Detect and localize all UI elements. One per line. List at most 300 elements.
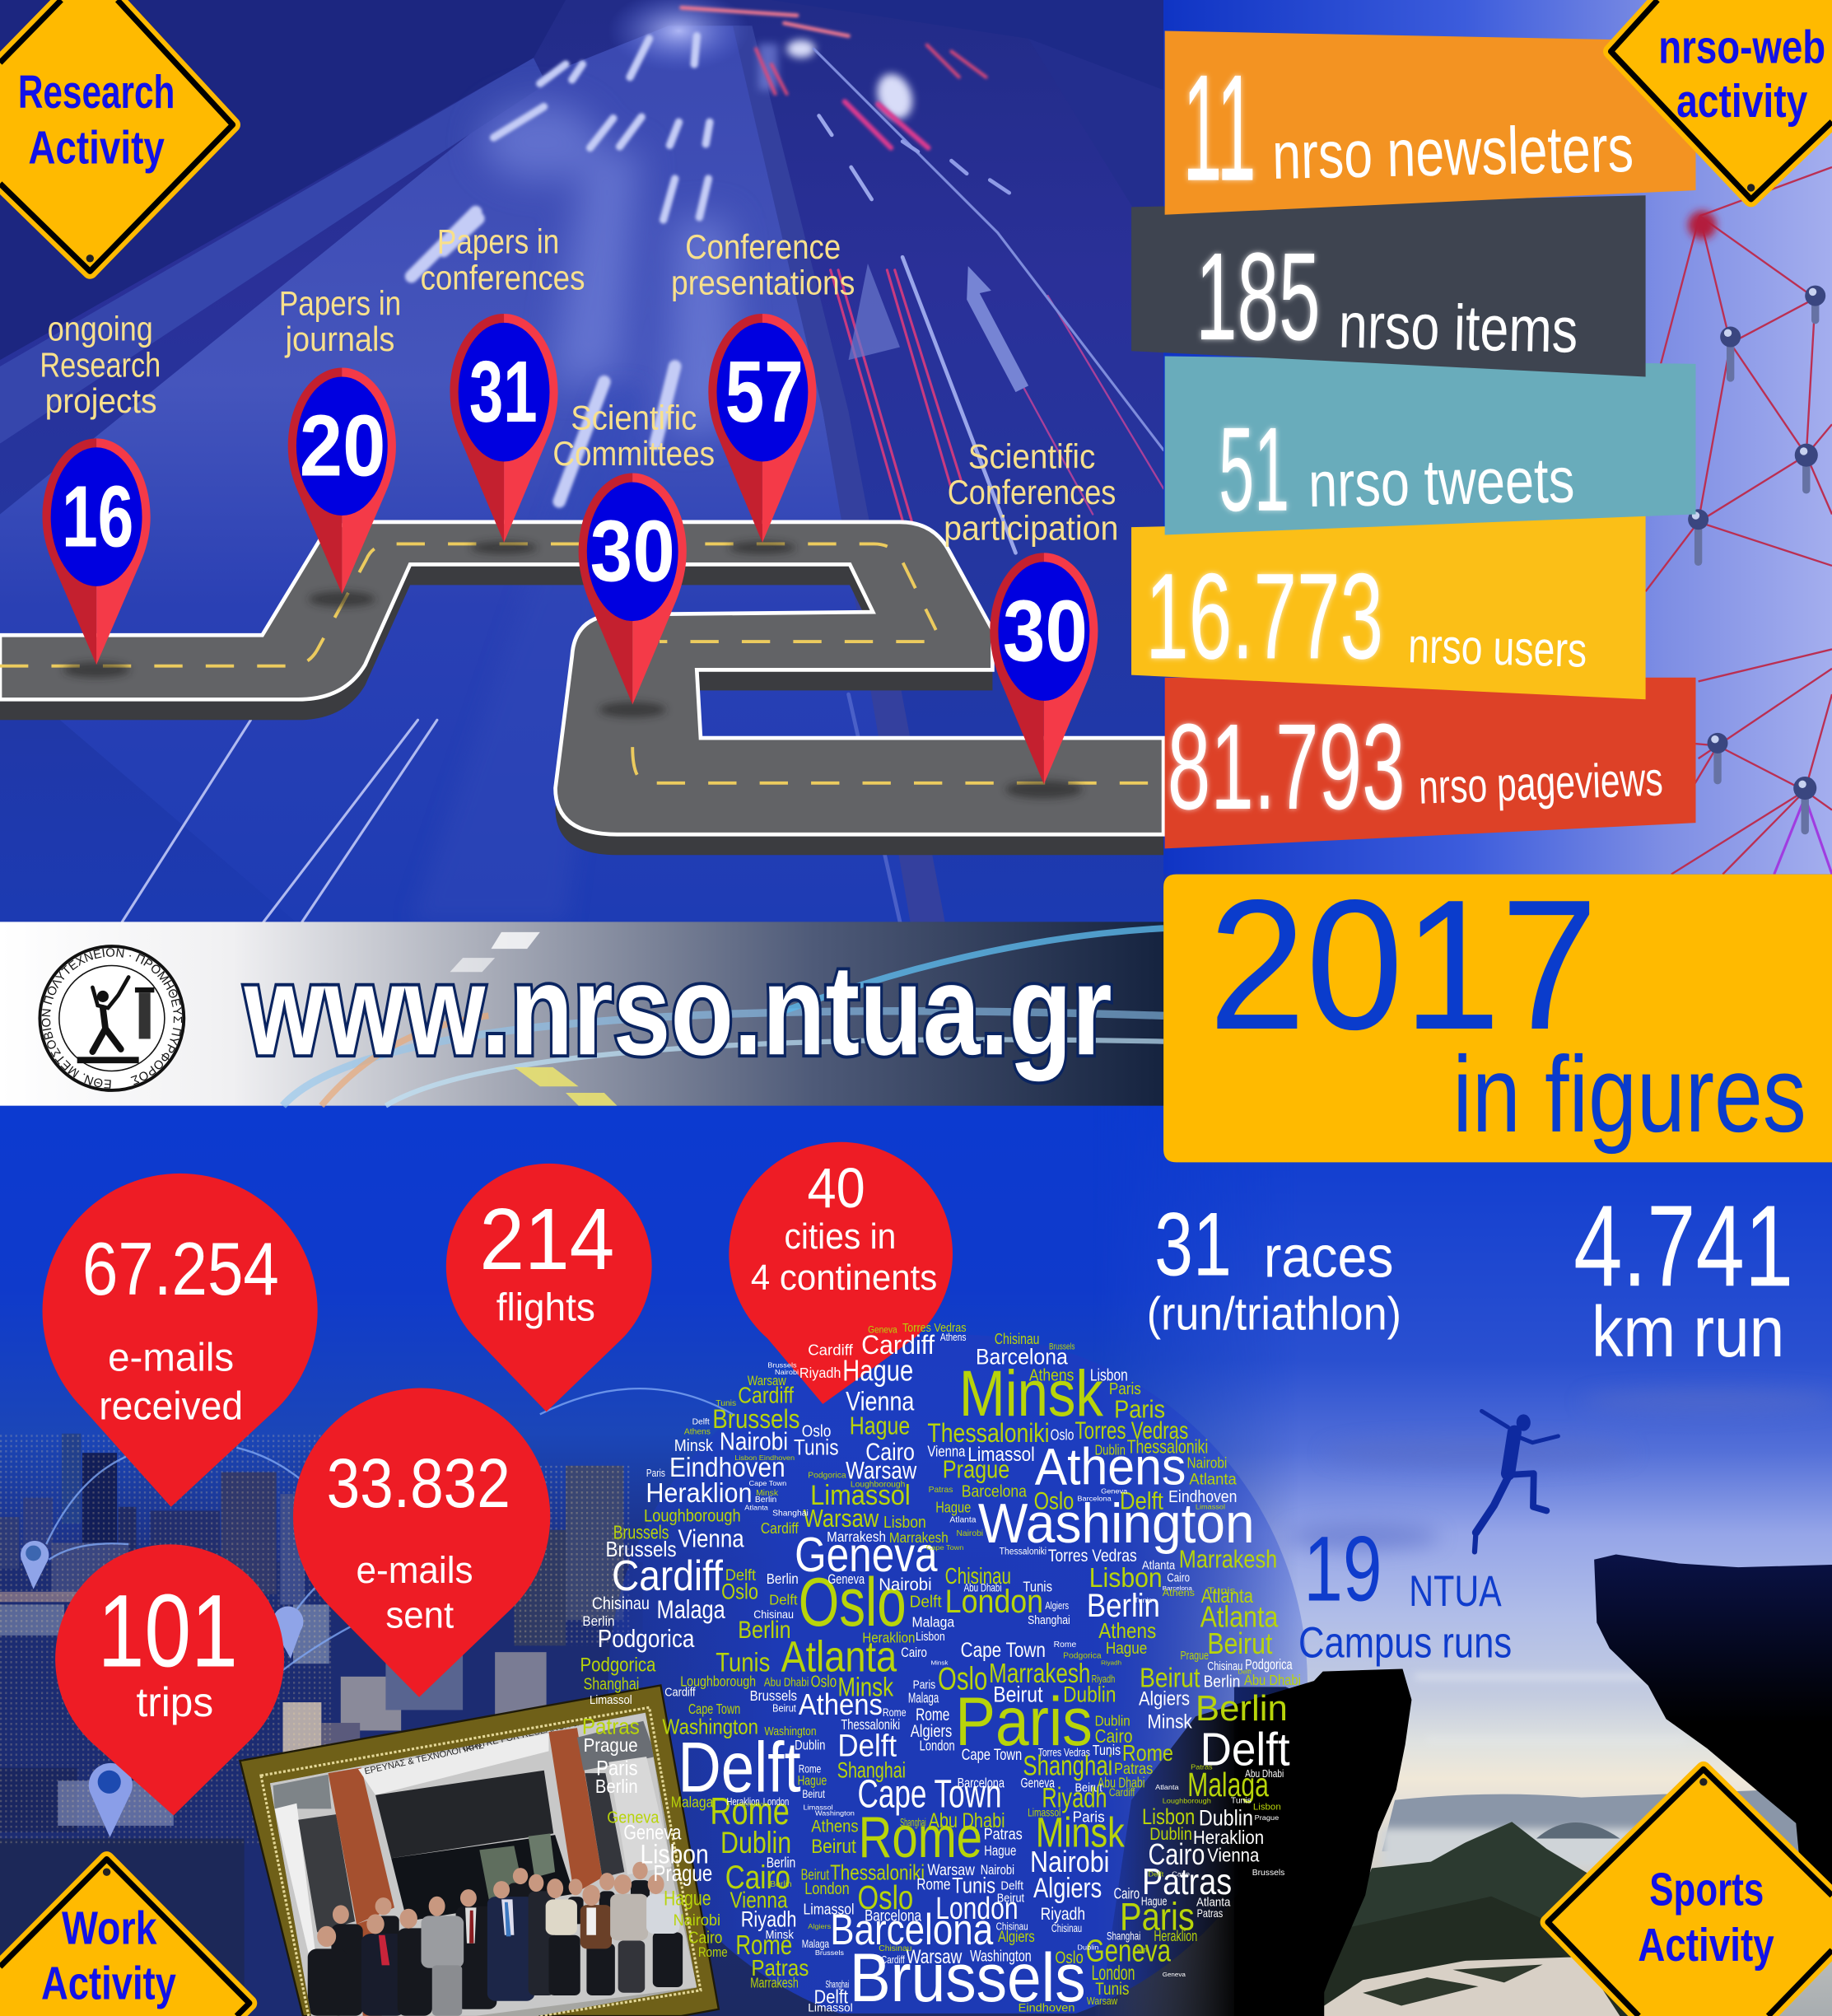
label: scientific conferences participation [944,436,1118,548]
wordcloud of cities: Nairobi [981,1862,1014,1878]
wordcloud of cities: Geneva [1101,1487,1127,1495]
label: scientific conferences participation: Scientific [968,436,1095,475]
wordcloud of cities: Brussels [850,1939,1086,2016]
map pin: conference presentations 57: 57 [725,343,804,441]
bar: nrso tweets [1165,356,1695,536]
wordcloud of cities: Cape Town [748,1479,786,1487]
network lines and nodes [1646,167,1832,875]
wordcloud of cities: Marrakesh [827,1528,886,1545]
wordcloud of cities: Rome [916,1705,949,1724]
sign: sports activity: Activity [1638,1919,1774,1971]
network photo background [1163,0,1832,875]
wordcloud of cities: Geneva [827,1572,865,1587]
wordcloud of cities: Delft [725,1566,756,1584]
wordcloud of cities: Delft [769,1592,798,1608]
wordcloud of cities: Athens [1035,1437,1186,1496]
wordcloud of cities: Beirut [1075,1781,1102,1795]
wordcloud of cities: Thessaloniki [841,1717,900,1733]
red pin: 101 trips: 101 [98,1574,238,1688]
wordcloud of cities: Barcelona [976,1344,1068,1369]
wordcloud of cities: Minsk [1147,1711,1192,1733]
label: scientific committees: Scientific [571,398,697,436]
wordcloud of cities: London [763,1795,789,1808]
panel: 2017 in figures: 2017 [1209,861,1598,1068]
banner: website url [0,922,1163,1106]
wordcloud of cities: Limassol [808,2002,853,2014]
wordcloud of cities: Prague [1181,1650,1209,1663]
label: conference presentations: presentations [671,264,855,302]
wordcloud of cities: Dublin [1149,1824,1192,1844]
wordcloud of cities: Abu Dhabi [764,1676,809,1689]
wordcloud of cities: Heraklion [739,1801,767,1808]
wordcloud of cities: Delft [814,1986,848,2007]
wordcloud of cities: Dublin [1095,1442,1126,1458]
bar: nrso pageviews: 81.793 [1168,699,1405,835]
wordcloud of cities: Cairo [688,1929,722,1947]
wordcloud of cities: Berlin [770,1880,792,1889]
logo: NTUA seal: ΕΘΝ. ΜΕΤΣΟΒΙΟΝ ΠΟΛΥΤΕΧΝΕΙΟΝ · ΠΡΟΜΗΘΕΥΣ ΠΥΡΦΟΡΟΣ [41,948,183,1089]
wordcloud of cities: Limassol [967,1444,1035,1466]
wordcloud of cities: Cape Town [857,1771,1002,1816]
wordcloud of cities: Paris [955,1683,1093,1760]
wordcloud of cities: Delft [1134,1947,1149,1953]
wordcloud of cities: Chisinau [753,1608,794,1622]
wordcloud of cities: Tunis [1095,1978,1130,1999]
wordcloud of cities: Atlanta [781,1632,897,1681]
wordcloud of cities: Barcelona [958,1776,1005,1790]
bar: nrso users [1131,516,1646,699]
wordcloud of cities: Eindhoven [669,1453,785,1483]
wordcloud of cities: Cape Town [962,1746,1022,1764]
wordcloud of cities: Lisbon [1142,1804,1195,1829]
wordcloud of cities: Abu Dhabi [1245,1767,1284,1780]
map pin: conference presentations 57 [708,314,816,543]
wordcloud of cities: Atlanta [1196,1896,1231,1910]
wordcloud of cities: London [945,1583,1043,1620]
wordcloud of cities: Podgorica [1245,1657,1293,1673]
wordcloud of cities: Chisinau [879,1944,911,1953]
stat: NTUA campus runs: Campus runs [1298,1618,1512,1667]
red pin: 214 flights: 214 [479,1191,614,1288]
wordcloud of cities: Paris [1073,1809,1105,1826]
wordcloud of cities: Rome [883,1706,907,1720]
wordcloud of cities: Nairobi [775,1368,799,1376]
wordcloud of cities: Prague [584,1735,638,1756]
stats: races and kilometres: (run/triathlon) [1147,1287,1401,1339]
wordcloud of cities: Rome [859,1805,982,1870]
red pin: 33.832 e-mails sent: sent [385,1594,455,1636]
wordcloud of cities: Berlin [738,1617,791,1644]
wordcloud of cities: Brussels [1049,1342,1075,1352]
red pin: 214 flights: flights [496,1286,595,1328]
red pin: 33.832 e-mails sent [293,1388,550,1697]
wordcloud of cities: Riyadh [1041,1904,1085,1924]
bottom panel background: sky, city and cliffs [0,1106,1832,2016]
wordcloud of cities: Shanghai [772,1510,809,1518]
wordcloud of cities: London [935,1892,1019,1926]
wordcloud of cities: Washington [978,1492,1255,1554]
wordcloud of cities: Dublin [1077,1944,1098,1952]
wordcloud of cities: Dublin [795,1738,825,1752]
red pin: 214 flights [446,1164,652,1412]
far hills and valley [1312,1790,1832,2016]
wordcloud of cities: Warsaw [927,1861,975,1879]
wordcloud of cities: Nairobi [674,1912,720,1930]
red pin: 40 cities in 4 continents: 4 continents [751,1258,937,1298]
wordcloud of cities: Berlin [1204,1673,1240,1692]
red pin: 33.832 e-mails sent: 33.832 [327,1444,510,1522]
stats: races and kilometres: 31 [1154,1195,1232,1295]
bar: nrso newsletters: 11 [1182,44,1256,213]
wordcloud of cities: Beirut [997,1892,1025,1905]
wordcloud of cities: Berlin [1196,1689,1288,1729]
wordcloud of cities: London [1092,1962,1135,1985]
wordcloud of cities: Geneva [607,1808,660,1827]
wordcloud of cities: Torres Vedras [1075,1418,1188,1444]
wordcloud of cities: Delft [1238,1668,1252,1675]
red pin: 67.254 e-mails received: 67.254 [82,1228,279,1311]
bar: nrso tweets: nrso tweets [1308,443,1575,520]
wordcloud of cities: Patras [1142,1861,1232,1902]
stat: NTUA campus runs: 19 [1303,1517,1382,1621]
wordcloud of cities: Minsk [930,1659,949,1667]
wordcloud of cities: Hague [850,1412,910,1440]
sign: work activity: Activity [41,1958,176,2009]
wordcloud of cities: Malaga [1187,1766,1269,1804]
wordcloud of cities: Lisbon [1090,1366,1128,1384]
wordcloud of cities: Oslo [799,1564,907,1640]
wordcloud of cities: London [920,1738,955,1753]
wordcloud of cities: London [804,1880,850,1898]
wordcloud of cities: Limassol [590,1694,632,1707]
wordcloud of cities: Rome [1122,1741,1173,1766]
wordcloud of cities: Shanghai [825,1979,849,1990]
wordcloud of cities: Marrakesh [750,1975,799,1991]
red pin: 33.832 e-mails sent: e-mails [357,1549,473,1591]
label: conference presentations: Conference [685,227,841,266]
wordcloud of cities: Cape [1172,1870,1190,1878]
sign: research activity [0,0,233,271]
red pin: 67.254 e-mails received [43,1174,318,1507]
wordcloud of cities: Oslo [938,1660,987,1696]
wordcloud of cities: Lisbon Eindhoven [734,1454,795,1462]
wordcloud of cities: Chisinau [945,1564,1011,1589]
wordcloud of cities: Vienna [846,1387,915,1416]
wordcloud of cities: Delft [1200,1724,1290,1776]
label: scientific committees [552,398,715,473]
wordcloud of cities: Tunis [952,1873,995,1897]
wordcloud of cities: Oslo [721,1579,758,1603]
wordcloud of cities: Riyadh [1042,1782,1107,1813]
banner: website url: www.nrso.ntua.gr [244,939,1112,1082]
label: papers in conferences [421,222,585,296]
label: papers in journals: journals [284,320,394,358]
panel: 2017 in figures [1163,861,1832,1162]
wordcloud of cities: Brussels [750,1687,797,1704]
wordcloud of cities: Berlin [767,1571,799,1587]
label: papers in journals: Papers in [279,284,401,322]
wordcloud of cities: Algiers [911,1721,952,1741]
wordcloud of cities: Rome [698,1944,728,1960]
wordcloud of cities: Algiers [1033,1872,1102,1904]
wordcloud of cities: Cairo [1148,1838,1205,1871]
wordcloud of cities: Shanghai [900,1817,926,1829]
wordcloud of cities: Cairo [1114,1886,1140,1902]
red pin: 101 trips [55,1544,284,1815]
bar: nrso newsletters: nrso newsleters [1271,112,1634,194]
wordcloud of cities: Heraklion [1193,1827,1264,1848]
wordcloud of cities: Geneva [1086,1934,1171,1968]
wordcloud of cities: Rome [799,1763,821,1776]
wordcloud of cities: Paris [646,1467,665,1479]
wordcloud of cities: Barcelona [865,1907,922,1925]
wordcloud of cities: Atlanta [744,1504,768,1511]
wordcloud of cities: Delft [910,1593,942,1611]
wordcloud of cities: Lisbon [916,1630,945,1644]
wordcloud of cities: Atlanta [1189,1471,1238,1488]
wordcloud of cities: Cardiff [738,1383,795,1408]
wordcloud of cities: Hague [1106,1640,1147,1658]
wordcloud of cities: Cardiff [808,1342,853,1360]
wordcloud of cities: Tunis [716,1649,770,1678]
wordcloud of cities: Patras [1197,1908,1223,1920]
wordcloud of cities: Shanghai [1028,1613,1070,1627]
sign: work activity: Work [62,1902,157,1954]
bar: nrso users: 16.773 [1145,548,1383,684]
bar: nrso users: nrso users [1407,618,1587,678]
red pin: 40 cities in 4 continents: 40 [808,1156,865,1220]
wordcloud of cities: Tunis [794,1435,839,1459]
wordcloud of cities: Malaga [908,1690,939,1706]
wordcloud of cities: Beirut [811,1836,856,1858]
wordcloud of cities: Beirut [1207,1627,1272,1660]
wordcloud of cities: Oslo [1034,1488,1074,1514]
wordcloud of cities: Delft [678,1727,801,1807]
wordcloud of cities: Cape Town [961,1640,1046,1662]
red pin: 40 cities in 4 continents: cities in [784,1216,896,1257]
sign: nrso-web activity: activity [1676,75,1807,127]
wordcloud of cities: Abu Dhabi [1098,1775,1144,1790]
wordcloud of cities: Athens [799,1688,883,1721]
wordcloud of cities: Cardiff [881,1953,905,1966]
wordcloud of cities: Atlanta [1155,1783,1179,1791]
wordcloud of cities: Loughborough [680,1673,756,1689]
wordcloud of cities: Brussels [712,1405,799,1435]
sign: sports activity [1548,1769,1832,2016]
wordcloud of cities: Riyadh [799,1365,841,1381]
wordcloud of cities: Heraklion [862,1630,916,1645]
wordcloud of cities: Malaga [671,1794,714,1812]
icon: jumping runner silhouette [1475,1411,1558,1552]
wordcloud of cities: Warsaw [846,1458,916,1484]
wordcloud of cities: Atlanta [1201,1586,1253,1608]
wordcloud of cities: Cairo [865,1440,915,1466]
wordcloud of cities: Beirut [993,1682,1043,1706]
wordcloud of cities: Minsk [674,1437,713,1455]
wordcloud of cities: Vienna [927,1444,966,1460]
map pin: papers in journals 20 [288,368,396,594]
wordcloud of cities: Athens [1029,1366,1074,1384]
wordcloud of cities: Riyadh [1101,1659,1121,1667]
wordcloud of cities: Oslo [1051,1427,1074,1444]
wordcloud of cities: Prague [1255,1813,1279,1822]
wordcloud of cities: Patras [751,1956,809,1981]
wordcloud of cities: Malaga [802,1938,830,1951]
wordcloud of cities: Beirut [801,1867,830,1883]
wordcloud of cities: Eindhoven [1019,2002,1075,2014]
map pin: scientific conferences participation 30: 30 [1003,582,1088,679]
wordcloud of cities: Limassol [1028,1807,1061,1819]
wordcloud of cities: Rome [1054,1640,1077,1650]
wordcloud of cities: Oslo [1055,1948,1084,1967]
wordcloud of cities: Hague [1141,1895,1167,1909]
wordcloud of cities: Heraklion [1154,1928,1197,1945]
wordcloud of cities: Hague [984,1843,1016,1859]
wordcloud of cities: Eindhoven [1168,1488,1237,1506]
city skyline [0,1434,643,2016]
wordcloud of cities: Shanghai [1023,1750,1112,1781]
wordcloud of cities: Dublin [1095,1713,1130,1729]
wordcloud of cities: Warsaw [748,1373,787,1388]
top-left highway photo background [0,0,1163,922]
stats: races and kilometres: races [1264,1224,1394,1290]
wordcloud of cities: Shanghai [1107,1930,1140,1943]
wordcloud of cities: Paris [1120,1896,1195,1939]
wordcloud of cities: Tunis [1231,1797,1252,1805]
wordcloud of cities: Athens [940,1331,967,1343]
wordcloud of cities: Tunis [1134,1596,1153,1604]
wordcloud of cities: Delft [837,1729,897,1763]
label: conference presentations [671,227,855,302]
wordcloud of cities: Cape Town [926,1543,963,1552]
wordcloud of cities: Podgorica [808,1472,846,1480]
wordcloud of cities: Torres Vedras [1038,1747,1090,1759]
wordcloud of cities: Lisbon [1253,1803,1281,1812]
map pin: ongoing research projects 16: 16 [62,469,133,566]
wordcloud of cities: Abu Dhabi [964,1582,1002,1594]
map marker icons in city [21,1541,303,1837]
wordcloud of cities: Patras [929,1486,953,1495]
wordcloud of cities: Loughborough [851,1481,905,1489]
wordcloud of cities: Chisinau [995,1332,1039,1348]
wordcloud of cities: Prague [654,1861,712,1887]
wordcloud of cities: Nairobi [956,1529,983,1538]
wordcloud of cities: Nairobi [720,1427,788,1455]
wordcloud of cities: Cairo [1167,1571,1190,1584]
wordcloud of cities: Minsk [756,1489,779,1498]
wordcloud of cities: Thessaloniki [1127,1436,1208,1458]
red pin: 40 cities in 4 continents [729,1142,953,1404]
map pin: ongoing research projects 16 [43,438,151,665]
bar: nrso items [1131,195,1646,376]
wordcloud of cities: Marrakesh [889,1529,949,1546]
wordcloud of cities: Athens [811,1816,859,1836]
wordcloud of cities: Chisinau [1207,1659,1242,1673]
wordcloud of cities: Atlanta [1200,1601,1279,1633]
wordcloud of cities: Algiers [998,1929,1035,1946]
wordcloud of cities: Barcelona [962,1482,1027,1501]
wordcloud of cities: Warsaw [803,1505,879,1533]
wordcloud of cities: Paris [596,1757,638,1780]
wordcloud of cities: Cairo [901,1645,927,1660]
sign: research activity: Research [18,66,175,118]
sign: research activity: Activity [28,121,165,173]
wordcloud of cities: Paris [1114,1395,1165,1423]
wordcloud of cities: Washington [662,1715,758,1738]
wordcloud of cities: Cardiff [664,1686,696,1699]
wordcloud of cities: Dublin [1063,1682,1116,1706]
wordcloud of cities: Delft [1148,1870,1164,1878]
wordcloud of cities: Minsk [959,1358,1103,1430]
wordcloud of cities: Dublin [720,1827,791,1860]
red pin: 67.254 e-mails received: e-mails [108,1335,234,1379]
wordcloud of cities: Rome [735,1930,792,1961]
wordcloud of cities: Delft [1120,1488,1163,1514]
wordcloud of cities: Cardiff [761,1521,799,1538]
wordcloud of cities: Berlin [1087,1587,1160,1624]
wordcloud of cities: Hague [798,1773,827,1789]
label: scientific conferences participation: Conferences [948,473,1116,511]
wordcloud of cities: Marrakesh [1179,1546,1277,1574]
wordcloud of cities: Malaga [911,1614,954,1631]
wordcloud of cities: Torres Vedras [902,1321,967,1335]
wordcloud of cities [580,1321,1301,2016]
label: ongoing research projects [40,310,161,420]
map pin: scientific committees 30: 30 [590,503,675,600]
wordcloud of cities: Podgorica [1063,1652,1102,1660]
wordcloud of cities: Geneva [1163,1971,1186,1978]
wordcloud of cities: Shanghai [837,1757,906,1782]
wordcloud of cities: Shanghai [584,1675,639,1693]
wordcloud of cities: Washington [815,1809,855,1817]
wordcloud of cities: Malaga [657,1595,725,1624]
wordcloud of cities: Thessaloniki [1000,1546,1047,1556]
map pin: papers in conferences 31: 31 [469,343,538,441]
wordcloud of cities: Hague [842,1355,913,1387]
wordcloud of cities: Atlanta [1142,1559,1175,1572]
wordcloud of cities: Abu Dhabi [1244,1672,1301,1688]
wordcloud of cities: Barcelona [1163,1584,1193,1592]
wordcloud of cities: Cape Town [688,1701,740,1717]
wordcloud of cities: Barcelona [1077,1495,1112,1503]
wordcloud of cities: Geneva [623,1822,682,1844]
red pin: 101 trips: trips [137,1679,213,1725]
wordcloud of cities: Riyadh [741,1906,796,1931]
wordcloud of cities: Algiers [1045,1599,1069,1612]
wordcloud of cities: Rome [710,1790,790,1833]
wordcloud of cities: Riyadh [1092,1673,1115,1685]
wordcloud of cities: Athens [684,1428,711,1436]
label: papers in conferences: Papers in [437,222,559,261]
wordcloud of cities: Minsk [837,1673,893,1702]
wordcloud of cities: Paris [1109,1379,1141,1398]
wordcloud of cities: Geneva [1021,1776,1055,1790]
wordcloud of cities: Patras [1191,1763,1213,1771]
wordcloud of cities: Patras [1114,1761,1153,1778]
map pin: papers in journals 20: 20 [300,398,385,495]
wordcloud of cities: Oslo [811,1673,837,1692]
road [0,522,1163,855]
stat: NTUA campus runs: NTUA [1409,1567,1502,1616]
wordcloud of cities: Geneva [868,1324,897,1336]
wordcloud of cities: Loughborough [644,1505,741,1525]
wordcloud of cities: Warsaw [907,1947,963,1968]
map pin: papers in conferences 31 [450,314,558,543]
wordcloud of cities: Thessaloniki [927,1419,1050,1449]
wordcloud of cities: Berlin [582,1613,614,1629]
wordcloud of cities: Delft [692,1418,710,1426]
wordcloud of cities: Loughborough [1163,1797,1211,1804]
